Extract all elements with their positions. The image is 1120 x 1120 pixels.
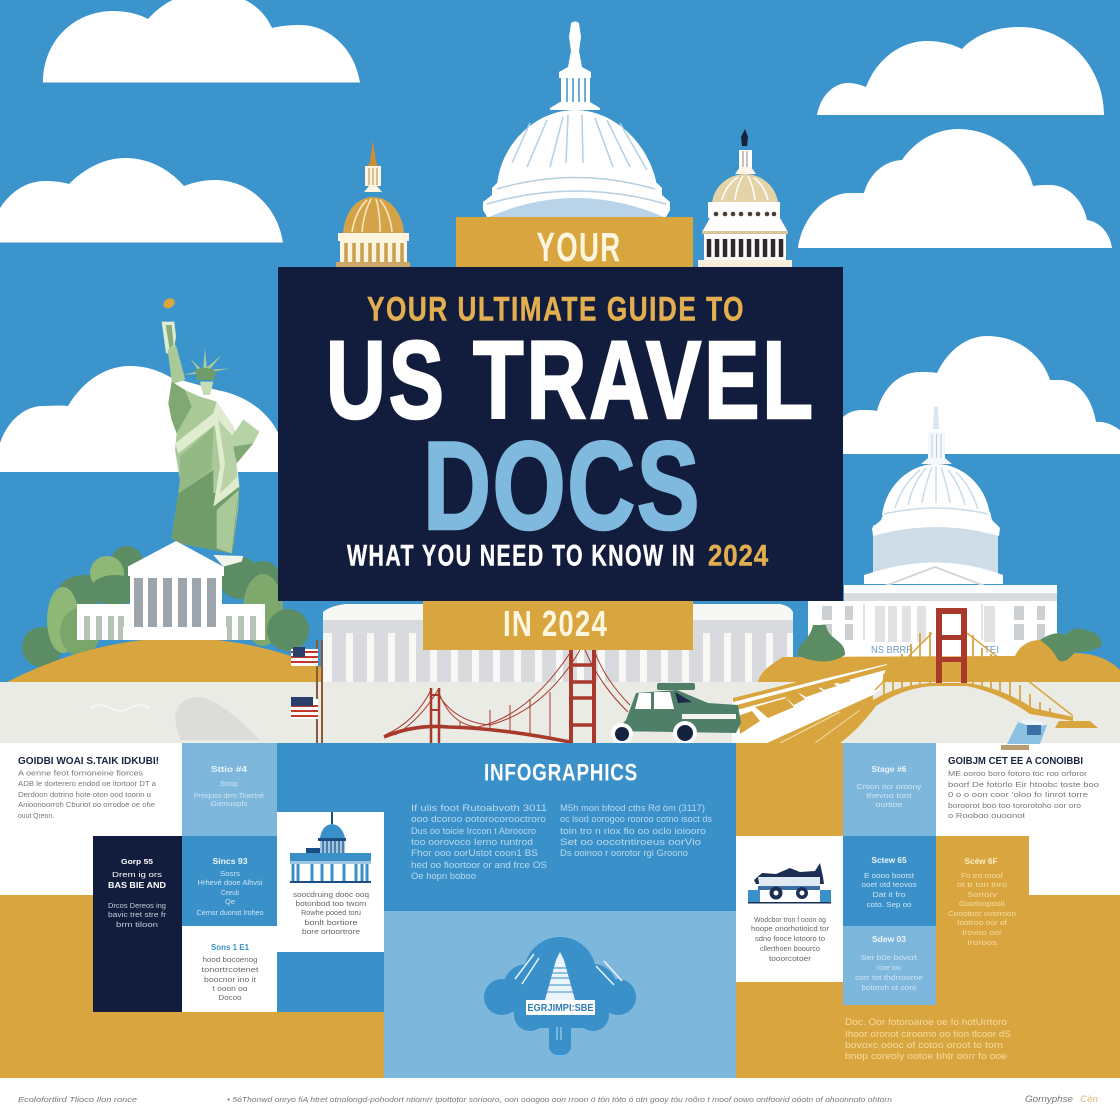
- step box: right light blue top: ourtioe: [876, 800, 902, 809]
- right white building with hills: NS BRRR: [871, 645, 913, 656]
- panel: infographics: If ulis foot Rutoabvoth 3011: [411, 803, 547, 814]
- panel: infographics: M5h mon bfood cths Rd óm (3117): [560, 803, 705, 814]
- eyebrow heading: YOUR ULTIMATE GUIDE TO: [367, 290, 745, 328]
- text block: top right: 0 o o oon coor ‘oloo fo Iinrot torre: [948, 790, 1088, 799]
- text block: top left: Anioorioorroh Cburiot oo orrodoe oe ohe: [18, 800, 155, 809]
- step box: right gold: Gootoopoolt: [959, 899, 1006, 908]
- panel: infographics: toin tro n riox fio oo oclo ioiooro: [560, 826, 706, 837]
- step box: right mid blue: [843, 836, 936, 926]
- text block: top left: A oenne feot fornoneine fiorces: [18, 768, 143, 778]
- text block: top right: o Rooboo ouoonot: [948, 811, 1026, 820]
- panel: infographics: ooo dcoroo ootorocorooctroro: [411, 814, 546, 825]
- step box: light blue: Gienuopls: [210, 799, 248, 808]
- left hill with statue of liberty: [7, 296, 353, 682]
- card: truck icon: sdno fooce lotooro to: [755, 934, 825, 943]
- right white building with hills: TEI: [984, 645, 999, 656]
- step box: light blue: [182, 743, 277, 836]
- banner: your: [456, 217, 693, 270]
- docs title: DOCS: [423, 417, 701, 556]
- subtitle: WHAT YOU NEED TO KNOW IN: [347, 540, 696, 572]
- card: truck icon: hoope onorhotioicd tor: [751, 924, 830, 933]
- step box: right light blue lower: rcoe tou: [877, 963, 901, 972]
- text block: top left: [18, 756, 159, 820]
- text block: top left: ouut Qreon.: [18, 811, 54, 820]
- panel: infographics: too oorovoco Ierno runtrod: [411, 837, 533, 848]
- banner: in 2024: [423, 601, 693, 650]
- step box: light blue: Sttio #4: [211, 764, 247, 774]
- icon: cloud capitol: [484, 937, 636, 1055]
- icon: cloud capitol: EGRJIMPI:SBE: [528, 1003, 594, 1014]
- step box: right light blue top: [843, 743, 936, 836]
- step box: right light blue lower: corr tot thdrrooroe: [855, 973, 923, 982]
- step box: right gold: Irovoo oor: [962, 928, 1003, 937]
- text block: top right: [948, 756, 1099, 820]
- step box: right gold: ot tr ton Inro: [957, 880, 1007, 889]
- panel: infographics: INFOGRAPHICS: [484, 760, 638, 786]
- step box: white: hood bocoenog: [202, 955, 258, 964]
- step box: right light blue top: Croon ocr oroony: [856, 782, 922, 791]
- red suspension bridge: [384, 650, 630, 743]
- step box: navy: BAS BIE AND: [108, 880, 166, 890]
- step box: right mid blue: E oooo bootst: [864, 871, 915, 880]
- step box: mid blue: Sosrs: [220, 869, 240, 878]
- step box: white: [182, 926, 277, 1012]
- panel: infographics: Set oo oocotntiroeus oorVio: [560, 837, 701, 848]
- panel: infographics: Oe hopn boboo: [411, 871, 476, 882]
- right cream dome: [698, 129, 792, 267]
- card: capitol icon: Rowhe pooed toru: [301, 908, 361, 917]
- icon: truck: [748, 863, 831, 904]
- step box: right gold: Iroroos: [967, 938, 997, 947]
- step box: right light blue lower: Sdew 03: [872, 934, 906, 944]
- sky background: [0, 0, 1120, 745]
- bottom panel backgrounds: [0, 743, 1120, 1078]
- title panel: [278, 267, 843, 601]
- step box: white: Sons 1 E1: [211, 942, 249, 952]
- text block: top right: ME ooroo boro fotoro toc roo orforor: [948, 769, 1088, 778]
- step box: mid blue: Hrhevé dooe Alhvsi: [198, 878, 263, 887]
- step box: mid blue: [182, 836, 277, 926]
- footer: • 5óThonwd onryo fiA htret otnolongd-pohodort ntiomrr tpottotor soriooro, oon ooogoo oon rroon ö tón tóto ó otn gooy tóu roôro t moof oowo ontfoorid oóotn of ohoonnoto ohtorn: [227, 1095, 892, 1104]
- main capitol dome: [483, 22, 670, 217]
- step box: right gold: [948, 856, 1016, 947]
- step box: right mid blue: Dat it fro: [872, 890, 906, 899]
- step box: white: t ooon oo: [212, 984, 248, 993]
- text block: top right: GOIBJM CET EE A CONOIBBI: [948, 756, 1083, 767]
- step box: right light blue lower: botoroh ot ooro: [862, 983, 916, 992]
- step box: navy: bavic tret stre fr: [108, 910, 167, 919]
- clouds: [0, 0, 1120, 472]
- step box: navy: [93, 836, 182, 1012]
- left gold dome: [336, 140, 410, 267]
- step box: right gold: Fo tro rooof: [961, 871, 1004, 880]
- card: truck icon: Wodcbor tron f ooon og: [754, 915, 826, 924]
- footer: Ecolofortlird Tlioco Ilon ronce: [18, 1095, 137, 1104]
- footer: [18, 1094, 1098, 1104]
- step box: right gold: Iootroo oor of: [957, 918, 1008, 927]
- card: capitol icon: soocdruing dooc ooq: [293, 890, 369, 899]
- step box: white: boocnor ino it: [204, 975, 257, 984]
- text block: top left: ADB le dorterero endod oe itortoor DT a: [18, 779, 157, 788]
- step box: right mid blue: Sctew 65: [872, 855, 907, 865]
- ground: [0, 682, 1120, 743]
- memorial building: [77, 541, 265, 640]
- text block: top left: GOIDBI WOAI S.TAIK IDKUBI!: [18, 756, 159, 767]
- step box: right gold: Coootoor ovorroon: [948, 909, 1016, 918]
- green truck: [611, 683, 741, 745]
- card: truck icon: tooorcotoer: [769, 954, 812, 963]
- right capitol building: [844, 407, 1057, 603]
- step box: right mid blue: coto. Sep oo: [866, 900, 912, 909]
- banner: in 2024: IN 2024: [503, 603, 608, 644]
- step box: right mid blue: ooet otd teovos: [862, 880, 917, 889]
- text block: gold paragraph: Doc. Oor fotoroaroe oe fo hotUrrtoro: [845, 1017, 1007, 1028]
- step box: right gold: Scéw 6F: [964, 856, 998, 866]
- step box: light blue: Stoop: [220, 779, 238, 788]
- step box: right light blue lower: [843, 926, 936, 1005]
- banner: your: YOUR: [536, 224, 622, 270]
- panel: infographics: Fhor ooo oorUstot coon1 BS: [411, 848, 538, 859]
- text block: top left: Derdoon dotrino hote oton ood toonn u: [18, 790, 151, 799]
- step box: white: tonortrcotenet: [202, 965, 260, 974]
- step box: mid blue: Cernsr duonst Iroheo: [196, 908, 264, 917]
- small figure: [1001, 719, 1047, 750]
- center white building: [323, 604, 793, 682]
- step box: light blue: Preiquos dem Tinertné: [194, 791, 264, 800]
- right white building with hills: [758, 601, 1120, 682]
- footer: Gornyphse: [1025, 1094, 1073, 1104]
- text block: top right: boorf De fotorlo Eir htoobc toste boo: [948, 780, 1099, 789]
- step box: white: Docoo: [218, 993, 242, 1002]
- text block: gold paragraph: bovoxc oooc of cotoo oroot to torn: [845, 1040, 1003, 1051]
- panel: infographics: hed oo fioortoor or and frce OS: [411, 860, 547, 871]
- step box: navy: Drcos Dereos ing: [108, 901, 166, 910]
- step box: navy: Gorp 55: [121, 857, 153, 866]
- card: truck icon: [736, 836, 843, 982]
- faint ground shape: [90, 697, 260, 740]
- step box: mid blue: Ceeub: [221, 888, 239, 897]
- hill: [7, 638, 353, 682]
- trees: [22, 546, 309, 667]
- panel: infographics: oc lsod oorogoo rooroo cotno isoct ds: [560, 814, 712, 825]
- text block: gold paragraph: [845, 1017, 1011, 1062]
- step box: right light blue top: thevoo tont: [866, 791, 913, 800]
- golden bridge road: [732, 608, 1098, 743]
- text block: top right: boroorot boo too tororotoho oor oro: [948, 801, 1081, 810]
- subtitle: 2024: [708, 540, 769, 572]
- main title: US TRAVEL: [326, 319, 816, 442]
- step box: mid blue: Sincs 93: [212, 856, 248, 866]
- text block: gold paragraph: bnop coreoly ootoe bhtr oorr fo ooe: [845, 1051, 1007, 1062]
- step box: navy: Drem ig ors: [112, 870, 162, 879]
- step box: right gold: Sorrorv: [967, 890, 997, 899]
- step box: right light blue top: Stage #6: [872, 764, 907, 774]
- statue of liberty: [161, 296, 259, 567]
- step box: right light blue lower: Ser b0e bovcrt: [861, 953, 918, 962]
- step box: mid blue: Qe: [225, 897, 235, 906]
- card: capitol icon: bore ortoortrore: [302, 927, 360, 936]
- footer: Cèn: [1080, 1094, 1098, 1104]
- step box: navy: brm tiloon: [116, 920, 158, 929]
- card: capitol icon: bonlt bortiore: [304, 918, 358, 927]
- card: capitol icon: [277, 812, 384, 952]
- flags and poles: [291, 640, 322, 743]
- icon: capitol: [290, 812, 371, 883]
- panel: infographics: [411, 760, 712, 882]
- panel: infographics: Ds ooinoo r oorotor rgi Groono: [560, 848, 688, 859]
- panel: infographics: Dus oo toicie Irccon t Abroocro: [411, 826, 536, 837]
- card: truck icon: cllerthoen boourco: [760, 944, 820, 953]
- card: capitol icon: botonbod too tworn: [296, 899, 366, 908]
- text block: gold paragraph: Ihoor oronot ciroomo oo tion tlcoor dS: [845, 1029, 1011, 1040]
